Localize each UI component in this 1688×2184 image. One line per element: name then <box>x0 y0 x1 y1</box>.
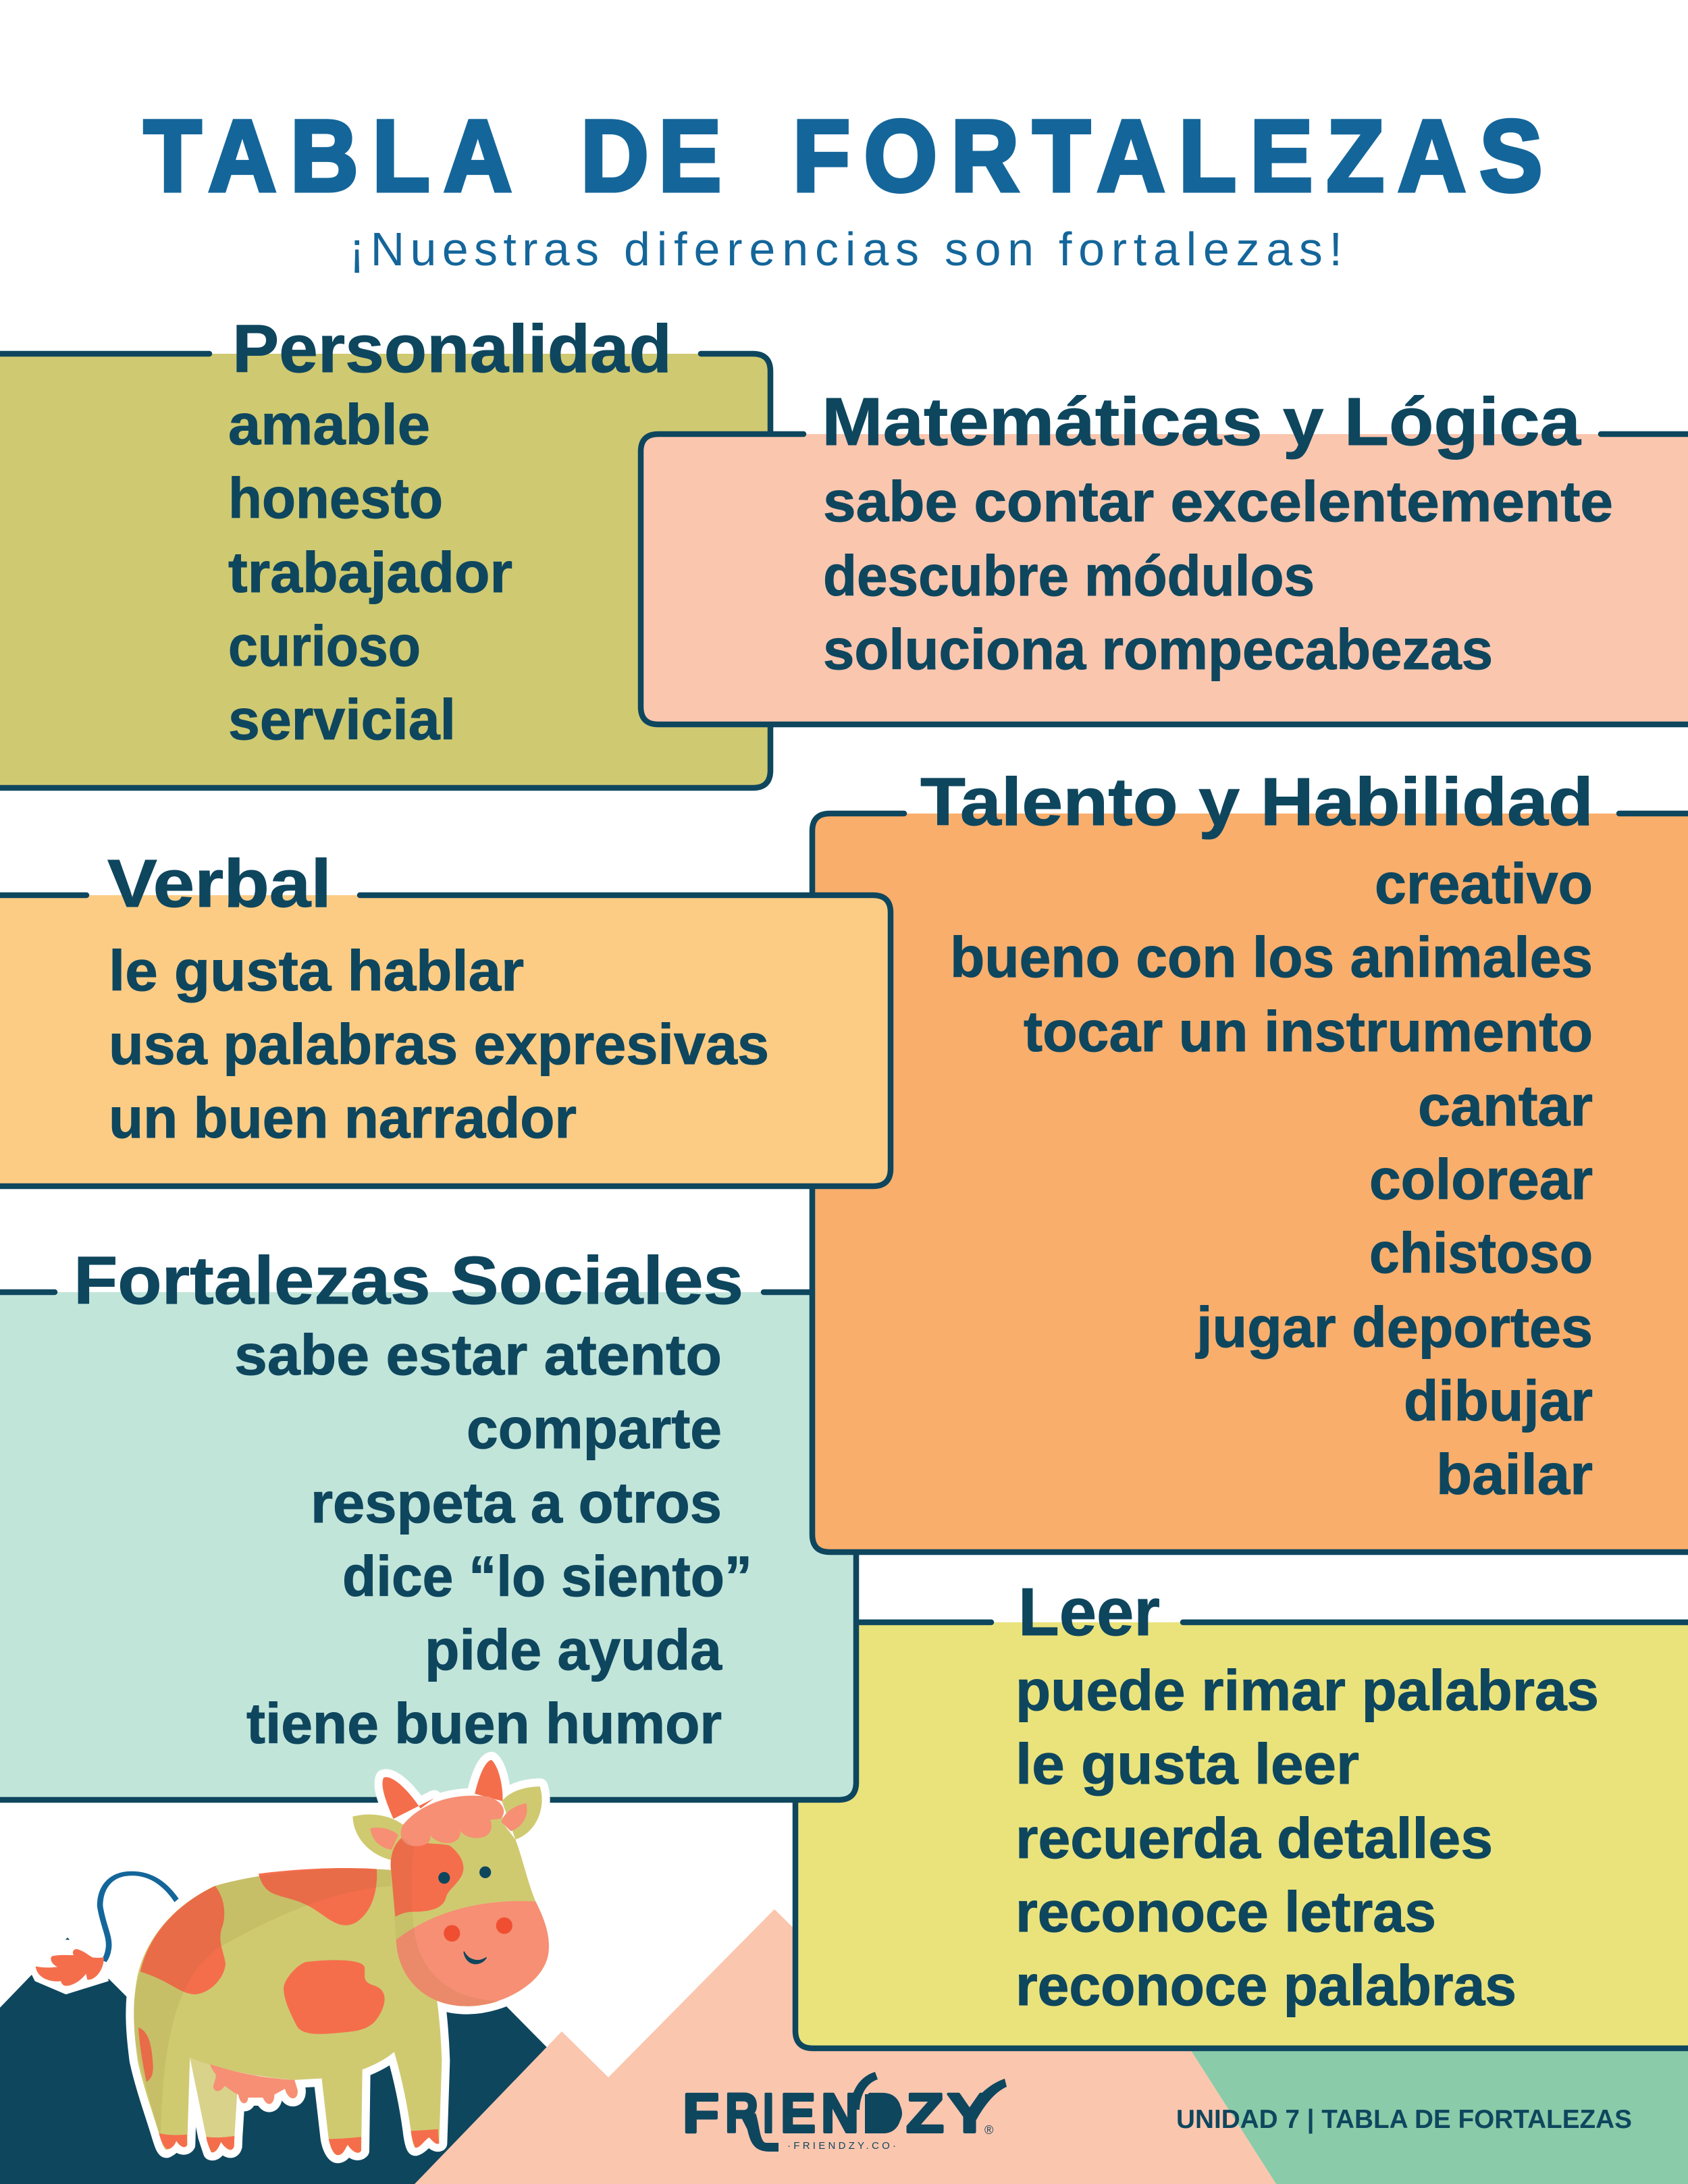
registered mark: ® <box>984 2123 993 2137</box>
panel: Fortalezas Sociales: comparte <box>467 1397 722 1460</box>
logo: Friendzy: F <box>683 2083 719 2144</box>
background mountains <box>0 1904 1688 2184</box>
title: DE <box>581 99 721 213</box>
panel: Fortalezas Sociales <box>0 1243 856 1800</box>
cow ears <box>352 1786 542 1860</box>
cow head <box>391 1796 549 2006</box>
panel: Personalidad: trabajador <box>228 541 512 604</box>
panel: Talento y Habilidad: creativo <box>1375 852 1593 915</box>
subtitle: fortalezas! <box>1059 223 1342 275</box>
panel: Fortalezas Sociales: Fortalezas Sociales <box>74 1243 743 1319</box>
cow face <box>438 1867 512 1964</box>
panel: Talento y Habilidad: jugar deportes <box>1195 1296 1593 1359</box>
panel: Talento y Habilidad: bailar <box>1436 1443 1593 1506</box>
panel: Verbal: usa palabras expresivas <box>109 1013 769 1076</box>
panel: Fortalezas Sociales: respeta a otros <box>311 1471 722 1535</box>
panel: Leer: recuerda detalles <box>1016 1807 1493 1870</box>
panel: Leer: Leer <box>1018 1574 1160 1650</box>
panel: Talento y Habilidad: bueno con los animales <box>950 926 1593 989</box>
cow spots <box>138 1868 385 2082</box>
panel: Matemáticas y Lógica: Matemáticas y Lógica <box>822 384 1581 460</box>
logo: Friendzy: E <box>781 2083 816 2144</box>
panel: Personalidad: honesto <box>228 467 443 530</box>
panel: Personalidad: Personalidad <box>232 311 672 387</box>
panel: Verbal <box>0 846 891 1186</box>
panel: Fortalezas Sociales: tiene buen humor <box>246 1692 722 1755</box>
logo: Friendzy: N <box>821 2083 859 2144</box>
cow muzzle <box>391 1838 549 2006</box>
panel: Personalidad <box>0 311 770 788</box>
panel: Fortalezas Sociales: sabe estar atento <box>234 1323 722 1387</box>
panel: Verbal: Verbal <box>107 846 332 922</box>
cow udder <box>210 2065 298 2104</box>
panel: Leer: reconoce letras <box>1016 1880 1436 1944</box>
subtitle: son <box>945 223 1034 275</box>
logo: Friendzy: Z <box>906 2083 944 2144</box>
title: FORTALEZAS <box>793 99 1542 213</box>
cow hooves <box>159 2129 439 2155</box>
panel: Personalidad: servicial <box>228 688 456 751</box>
subtitle <box>349 223 1342 275</box>
panel: Matemáticas y Lógica <box>641 384 1688 724</box>
subtitle: ¡Nuestras <box>349 223 599 275</box>
panel: Talento y Habilidad: chistoso <box>1369 1221 1593 1285</box>
logo: Friendzy <box>683 2072 1007 2152</box>
panel: Leer: puede rimar palabras <box>1016 1659 1599 1722</box>
title: TABLA <box>144 99 512 213</box>
panel: Talento y Habilidad: dibujar <box>1404 1369 1593 1433</box>
cow head spot and forelock <box>391 1796 504 1917</box>
panel: Leer: le gusta leer <box>1016 1732 1359 1796</box>
cow tail <box>29 1873 180 1994</box>
panel: Leer: reconoce palabras <box>1016 1954 1516 2017</box>
panel: Talento y Habilidad: colorear <box>1369 1148 1593 1211</box>
illustration: cow <box>29 1760 549 2155</box>
logo flourishes <box>745 2072 1007 2152</box>
cow far leg <box>190 2058 237 2152</box>
panel: Leer <box>795 1574 1688 2048</box>
panel: Matemáticas y Lógica: sabe contar excelentemente <box>823 470 1613 533</box>
cow ear inner <box>370 1803 527 1850</box>
panel: Verbal: le gusta hablar <box>109 939 524 1003</box>
title <box>144 99 1542 213</box>
logo: Friendzy: D <box>866 2083 902 2144</box>
logo: Friendzy: I <box>763 2083 774 2144</box>
logo: Friendzy: R <box>725 2083 758 2144</box>
panel: Talento y Habilidad: cantar <box>1418 1074 1593 1138</box>
panel: Talento y Habilidad: Talento y Habilidad <box>920 764 1593 840</box>
panel: Verbal: un buen narrador <box>109 1086 577 1150</box>
cow horns <box>382 1760 503 1819</box>
cow body shading <box>134 1869 392 2133</box>
panel: Fortalezas Sociales: pide ayuda <box>425 1618 722 1682</box>
logo url: ·FRIENDZY.CO· <box>787 2140 896 2152</box>
panel: Personalidad: curioso <box>228 614 421 678</box>
panel: Personalidad: amable <box>228 393 430 456</box>
logo: Friendzy: Y <box>947 2083 992 2144</box>
panel: Talento y Habilidad: tocar un instrumento <box>1024 1000 1593 1063</box>
panel: Matemáticas y Lógica: descubre módulos <box>823 544 1315 608</box>
cow white outline <box>134 1760 549 2155</box>
panel: Matemáticas y Lógica: soluciona rompecabezas <box>823 618 1493 681</box>
panel: Fortalezas Sociales: dice “lo siento” <box>342 1545 752 1608</box>
panel: Talento y Habilidad <box>812 764 1688 1552</box>
subtitle: diferencias <box>624 223 919 275</box>
cow body <box>134 1869 442 2155</box>
footer label: UNIDAD 7 | TABLA DE FORTALEZAS <box>1176 2105 1632 2134</box>
